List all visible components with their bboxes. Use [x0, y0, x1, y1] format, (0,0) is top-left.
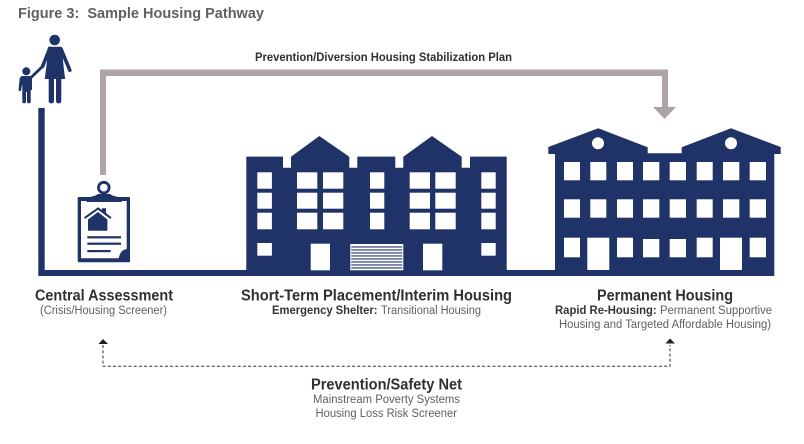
- label: short-term placement: Emergency Shelter:: [272, 305, 378, 317]
- arrow label: Prevention/Diversion Housing Stabilization Plan: Prevention/Diversion Housing Stabilization Plan: [255, 52, 512, 64]
- label: permanent housing: Housing and Targeted Affordable Housing): [559, 319, 771, 331]
- label: permanent housing: Permanent Supportive: [660, 305, 772, 317]
- label: prevention/safety net: [311, 376, 462, 420]
- label: permanent housing: Permanent Housing: [597, 288, 733, 304]
- label: permanent housing: [555, 288, 772, 331]
- building: permanent housing: [548, 128, 781, 276]
- dashed double arrow: [98, 338, 675, 366]
- icon: clipboard with house: [78, 182, 130, 262]
- label: central assessment: (Crisis/Housing Screener): [40, 305, 167, 317]
- title: Figure 3: Sample Housing Pathway: [18, 6, 264, 22]
- blue pathway line: [38, 108, 560, 276]
- label: short-term placement: [241, 288, 512, 317]
- label: permanent housing: Rapid Re-Housing:: [555, 305, 657, 317]
- label: central assessment: Central Assessment: [35, 288, 173, 304]
- label: prevention/safety net: Prevention/Safety Net: [311, 376, 462, 394]
- label: prevention/safety net: Mainstream Poverty Systems: [313, 394, 460, 406]
- gray prevention/diversion arrow: [100, 70, 676, 175]
- building: short-term placement: [246, 136, 507, 276]
- label: short-term placement: Short-Term Placement/Interim Housing: [241, 288, 512, 304]
- label: short-term placement: Transitional Housing: [381, 305, 481, 317]
- label: central assessment: [35, 288, 173, 317]
- label: prevention/safety net: Housing Loss Risk Screener: [316, 408, 457, 420]
- icon: adult holding child's hand: [19, 35, 70, 103]
